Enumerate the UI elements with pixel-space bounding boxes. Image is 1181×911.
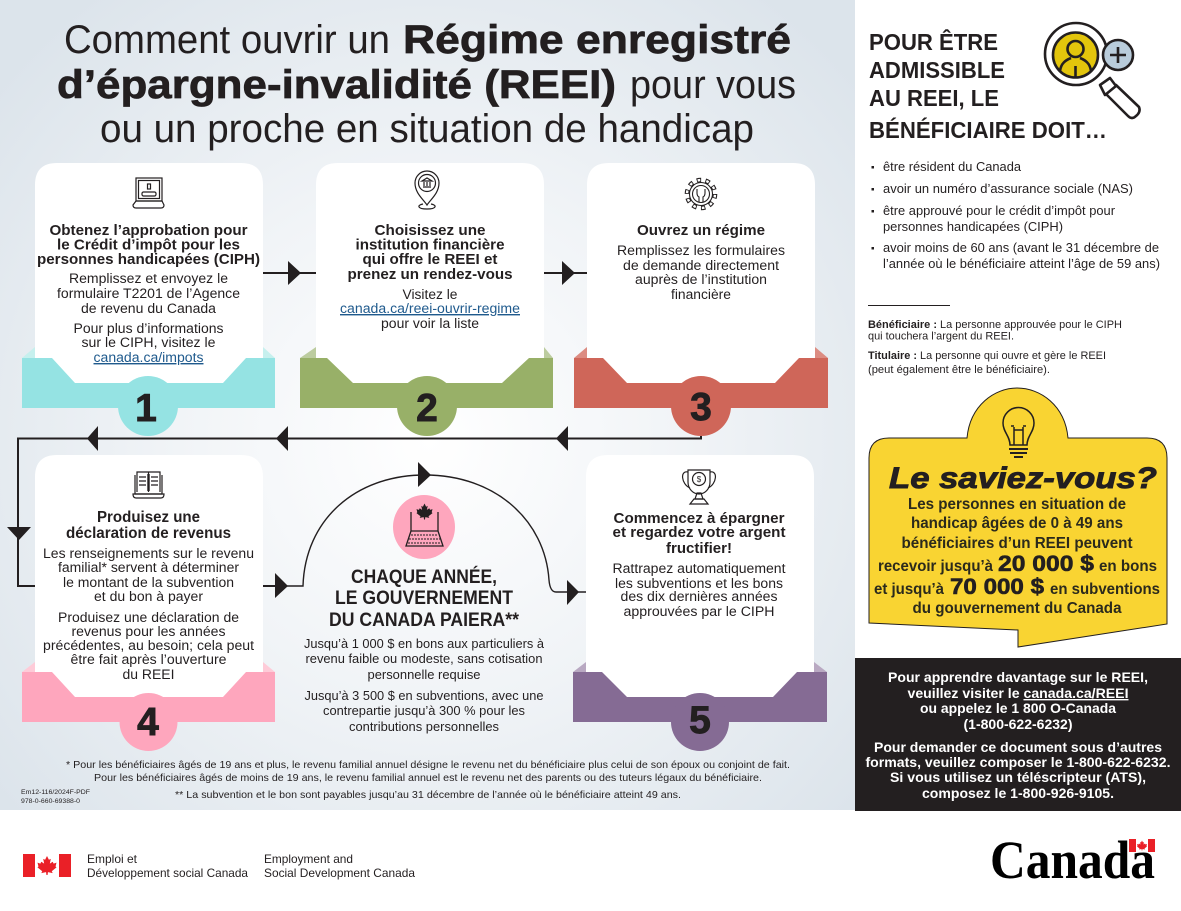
step 5 heading: Commencez à épargner — [614, 510, 785, 527]
contact text: (1-800-622-6232) — [964, 717, 1072, 732]
step 5 heading — [612, 510, 786, 557]
step 4 body text: Produisez une déclaration de — [58, 609, 239, 625]
step number 1: 1 — [135, 387, 157, 430]
step 4 body text: du REEI — [122, 666, 174, 682]
step 3 body text: de demande directement — [623, 257, 779, 273]
government body text: Jusqu’à 3 500 $ en subventions, avec une — [304, 688, 544, 703]
step 1 body text: Remplissez et envoyez le — [69, 270, 228, 286]
step 4 heading — [66, 509, 231, 542]
step 5 body text: approuvées par le CIPH — [624, 603, 774, 619]
definitions: Titulaire : La personne qui ouvre et gère le REEI — [868, 350, 1106, 362]
icon: pink circle with maple leaf laptop — [393, 495, 455, 559]
step 2 heading: Choisissez une — [374, 222, 486, 239]
step 3 body text — [617, 242, 785, 302]
panel: government contribution — [304, 495, 545, 734]
contact text — [866, 670, 1170, 801]
contact text: Pour demander ce document sous d’autres — [874, 740, 1162, 755]
department name english: Social Development Canada — [264, 866, 415, 880]
step 1 body text — [57, 270, 240, 365]
step number 5: 5 — [689, 699, 711, 742]
step 5 body text — [612, 560, 786, 619]
eligibility heading: AU REEI, LE — [869, 85, 999, 111]
step 4 body text: familial* servent à déterminer — [58, 559, 239, 575]
step 5 body text: les subventions et les bons — [615, 575, 783, 591]
step 4 heading: déclaration de revenus — [66, 525, 231, 542]
contact text: Si vous utilisez un téléscripteur (ATS), — [890, 770, 1146, 785]
canada wordmark: Canada — [990, 830, 1155, 890]
callout text: en bons — [1099, 558, 1157, 575]
footnotes: Pour les bénéficiaires âgés de moins de 19 ans, le revenu familial annuel est le revenu net des parents ou des tuteurs légaux du bénéficiaire. — [94, 772, 762, 784]
icon: book and tax document — [133, 472, 164, 498]
panel: eligibility — [868, 23, 1160, 376]
callout text: et jusqu’à — [874, 581, 944, 598]
contact text: veuillez visiter le canada.ca/REEI — [908, 686, 1128, 701]
government body text: contributions personnelles — [349, 719, 499, 734]
contact text: composez le 1-800-926-9105. — [922, 786, 1114, 801]
step 2 heading: qui offre le REEI et — [362, 251, 498, 268]
government body text — [304, 636, 545, 734]
step 1 body text: formulaire T2201 de l’Agence — [57, 285, 240, 301]
eligibility list — [872, 159, 1160, 271]
callout text: 70 000 $ — [950, 574, 1044, 599]
step 2 heading — [348, 222, 512, 283]
government body text: personnelle requise — [368, 667, 480, 682]
icon: canadian flag signature — [23, 854, 71, 877]
callout text: 20 000 $ — [998, 551, 1094, 576]
step 4 heading: Produisez une — [97, 509, 200, 526]
publication numbers: 978-0-660-69388-0 — [21, 798, 80, 805]
title: d’épargne-invalidité (REEI) — [57, 63, 616, 107]
step 1 body text: de revenu du Canada — [81, 300, 216, 316]
step 3 body text: Remplissez les formulaires — [617, 242, 785, 258]
publication numbers — [21, 789, 90, 805]
step 3 heading: Ouvrez un régime — [637, 222, 765, 239]
step 2 body text: Visitez le — [402, 286, 458, 302]
title: pour vous — [630, 63, 796, 107]
step 2 body text: pour voir la liste — [381, 315, 479, 331]
footnotes — [66, 759, 790, 801]
department name french: Emploi et — [87, 852, 138, 866]
government heading: CHAQUE ANNÉE, — [351, 566, 497, 588]
step 4 body text: précédentes, au besoin; cela peut — [43, 637, 254, 653]
government heading: DU CANADA PAIERA** — [329, 610, 520, 631]
callout text: Les personnes en situation de — [908, 496, 1126, 513]
step 1 heading: le Crédit d’impôt pour les — [57, 236, 240, 254]
callout text: bénéficiaires d’un REEI peuvent — [902, 535, 1133, 552]
icon: laptop with password — [133, 178, 164, 208]
step 5 body text: des dix dernières années — [620, 588, 778, 604]
callout text: handicap âgées de 0 à 49 ans — [911, 515, 1123, 532]
step 4 body text: le montant de la subvention — [63, 574, 234, 590]
step 5 heading: fructifier! — [666, 540, 732, 557]
step number 4: 4 — [137, 701, 159, 744]
callout: le saviez-vous — [869, 388, 1167, 647]
footnotes: * Pour les bénéficiaires âgés de 19 ans et plus, le revenu familial annuel désigne le revenu net du bénéficiaire plus celui de son époux ou conjoint de fait. — [66, 759, 790, 771]
icon: trophy with dollar coin: $ — [697, 475, 702, 484]
step 1 heading: personnes handicapées (CIPH) — [37, 251, 260, 268]
step 5 heading: et regardez votre argent — [612, 524, 786, 541]
contact text: ou appelez le 1 800 O-Canada — [920, 701, 1116, 716]
government body text: Jusqu’à 1 000 $ en bons aux particuliers à — [304, 636, 545, 651]
step number 3: 3 — [690, 386, 712, 429]
contact text: formats, veuillez composer le 1-800-622-6232. — [866, 755, 1170, 770]
department name french — [87, 852, 248, 880]
panel: step 3 — [574, 163, 828, 436]
panel: step 4 — [22, 455, 275, 751]
step 2 heading: institution financière — [356, 236, 504, 254]
definitions: (peut également être le bénéficiaire). — [868, 364, 1050, 376]
step number 2: 2 — [416, 387, 438, 430]
step 2 heading: prenez un rendez-vous — [348, 266, 512, 283]
definitions: Bénéficiaire : La personne approuvée pour le CIPH — [868, 319, 1122, 331]
government heading: LE GOUVERNEMENT — [335, 588, 513, 609]
department name french: Développement social Canada — [87, 866, 248, 880]
eligibility list: être approuvé pour le crédit d’impôt pour — [883, 203, 1116, 218]
title: Comment ouvrir un — [64, 18, 390, 62]
eligibility list: avoir un numéro d’assurance sociale (NAS) — [883, 181, 1133, 196]
connector arrows between steps — [7, 261, 701, 605]
icon: bank location pin — [415, 171, 439, 209]
callout text: du gouvernement du Canada — [912, 600, 1122, 617]
department name english: Employment and — [264, 852, 353, 866]
callout text: recevoir jusqu’à — [878, 558, 993, 575]
panel: contact information — [855, 658, 1181, 811]
eligibility heading: BÉNÉFICIAIRE DOIT… — [869, 116, 1107, 143]
eligibility list: être résident du Canada — [883, 159, 1022, 174]
step 4 body text: et du bon à payer — [94, 588, 203, 604]
publication numbers: Em12-116/2024F-PDF — [21, 789, 90, 796]
callout text: en subventions — [1050, 581, 1160, 598]
callout text — [874, 496, 1160, 617]
footnotes: ** La subvention et le bon sont payables jusqu’au 31 décembre de l’année où le bénéficiaire atteint 49 ans. — [175, 789, 681, 801]
step 4 body text: Les renseignements sur le revenu — [43, 545, 254, 561]
eligibility heading — [869, 28, 1107, 143]
step 3 body text: financière — [671, 286, 731, 302]
definitions — [868, 319, 1122, 376]
step 4 body text: être fait après l’ouverture — [70, 651, 227, 667]
icon: gear with wrench — [687, 180, 715, 208]
eligibility list: personnes handicapées (CIPH) — [883, 219, 1063, 234]
step 4 body text: revenus pour les années — [72, 623, 226, 639]
panel: step 1 — [22, 163, 275, 436]
step 2 body text — [340, 286, 520, 331]
panel: step 5 — [573, 455, 827, 751]
step 1 body text: sur le CIPH, visitez le — [82, 334, 216, 350]
step 5 body text: Rattrapez automatiquement — [612, 560, 786, 576]
step 2 body text: canada.ca/reei-ouvrir-regime — [340, 300, 520, 316]
icon: magnifying glass with person — [1045, 23, 1140, 118]
panel: step 2 — [300, 163, 553, 436]
icon: trophy with dollar coin — [683, 470, 715, 504]
step 3 body text: auprès de l’institution — [635, 271, 767, 287]
step 1 body text: Pour plus d’informations — [74, 320, 224, 336]
step 4 body text — [43, 545, 254, 682]
government body text: revenu faible ou modeste, sans cotisation — [306, 651, 542, 666]
eligibility heading: ADMISSIBLE — [869, 57, 1005, 83]
contact text: Pour apprendre davantage sur le REEI, — [888, 670, 1148, 685]
government body text: contrepartie jusqu’à 300 % pour les — [323, 703, 525, 718]
callout heading: Le saviez-vous? — [889, 462, 1157, 495]
icon: light bulb — [1003, 407, 1034, 457]
eligibility list: avoir moins de 60 ans (avant le 31 décembre de — [883, 240, 1159, 255]
eligibility list: l’année où le bénéficiaire atteint l’âge de 59 ans) — [883, 256, 1160, 271]
step 1 heading — [37, 222, 260, 268]
title: Régime enregistré — [403, 18, 791, 62]
department name english — [264, 852, 415, 880]
eligibility heading: POUR ÊTRE — [869, 28, 998, 55]
government heading — [329, 566, 520, 631]
title: ou un proche en situation de handicap — [100, 107, 754, 151]
step 1 body text: canada.ca/impots — [94, 349, 204, 365]
title — [57, 18, 796, 151]
definitions: qui touchera l’argent du REEI. — [868, 330, 1014, 342]
step 1 heading: Obtenez l’approbation pour — [50, 222, 248, 239]
